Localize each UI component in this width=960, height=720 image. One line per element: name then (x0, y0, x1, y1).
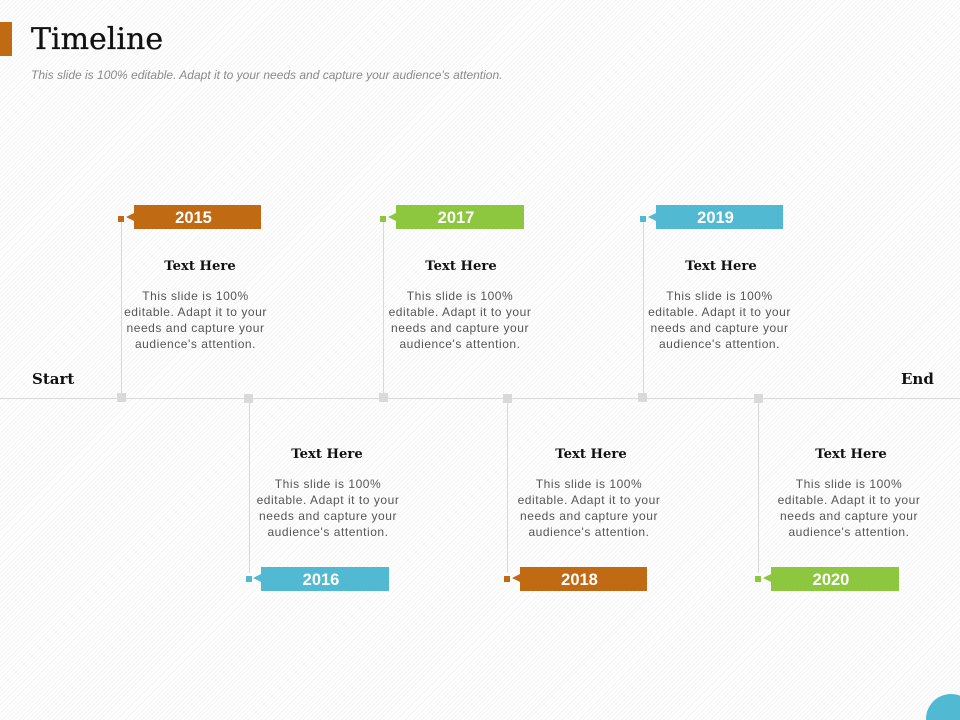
axis line (0, 398, 960, 399)
milestone 2018: needs and capture your (520, 509, 658, 523)
milestone 2017: 2017 (438, 209, 474, 227)
milestone 2018: editable. Adapt it to your (518, 493, 660, 507)
milestone 2019: Text Here (685, 259, 757, 274)
milestone 2020: Text Here (815, 447, 887, 462)
subtitle: This slide is 100% editable. Adapt it to your needs and capture your audience's attention. (31, 68, 502, 82)
title accent bar (0, 22, 12, 56)
milestone 2019: needs and capture your (651, 321, 788, 335)
start label: Start (32, 370, 74, 388)
milestone 2018: 2018 (561, 571, 598, 589)
milestone 2017: This slide is 100% (407, 289, 513, 303)
milestone 2019 (638, 205, 791, 402)
milestone 2015: Text Here (164, 259, 236, 274)
corner circle (926, 694, 960, 720)
milestone 2017: Text Here (425, 259, 497, 274)
milestone 2015: 2015 (175, 209, 212, 227)
milestone 2018 (503, 394, 660, 591)
milestone 2018: audience's attention. (528, 525, 650, 539)
milestone 2015: needs and capture your (127, 321, 264, 335)
milestone 2015: audience's attention. (135, 337, 256, 351)
milestone 2020: needs and capture your (780, 509, 918, 523)
milestone 2020: editable. Adapt it to your (778, 493, 920, 507)
milestone 2020: This slide is 100% (796, 477, 902, 491)
milestone 2020 (754, 394, 920, 591)
milestone 2019: audience's attention. (659, 337, 780, 351)
milestone 2019: This slide is 100% (666, 289, 773, 303)
milestone 2020: 2020 (813, 571, 849, 589)
milestone 2016: Text Here (291, 447, 363, 462)
milestone 2016 (244, 394, 399, 591)
milestone 2016: 2016 (303, 571, 339, 589)
milestone 2016: This slide is 100% (275, 477, 381, 491)
milestone 2017 (379, 205, 531, 402)
milestone 2019: 2019 (697, 209, 734, 227)
milestone 2018: This slide is 100% (536, 477, 642, 491)
milestone 2017: needs and capture your (391, 321, 529, 335)
milestone 2019: editable. Adapt it to your (648, 305, 791, 319)
title: Timeline (31, 22, 163, 57)
milestone 2016: needs and capture your (259, 509, 397, 523)
milestone 2016: editable. Adapt it to your (257, 493, 399, 507)
milestone 2015: editable. Adapt it to your (124, 305, 267, 319)
milestone 2016: audience's attention. (267, 525, 389, 539)
milestone 2020: audience's attention. (788, 525, 910, 539)
milestone 2017: editable. Adapt it to your (389, 305, 531, 319)
end label: End (901, 370, 934, 388)
milestone 2015 (117, 205, 267, 402)
milestone 2015: This slide is 100% (142, 289, 249, 303)
milestone 2018: Text Here (555, 447, 627, 462)
milestone 2017: audience's attention. (399, 337, 521, 351)
